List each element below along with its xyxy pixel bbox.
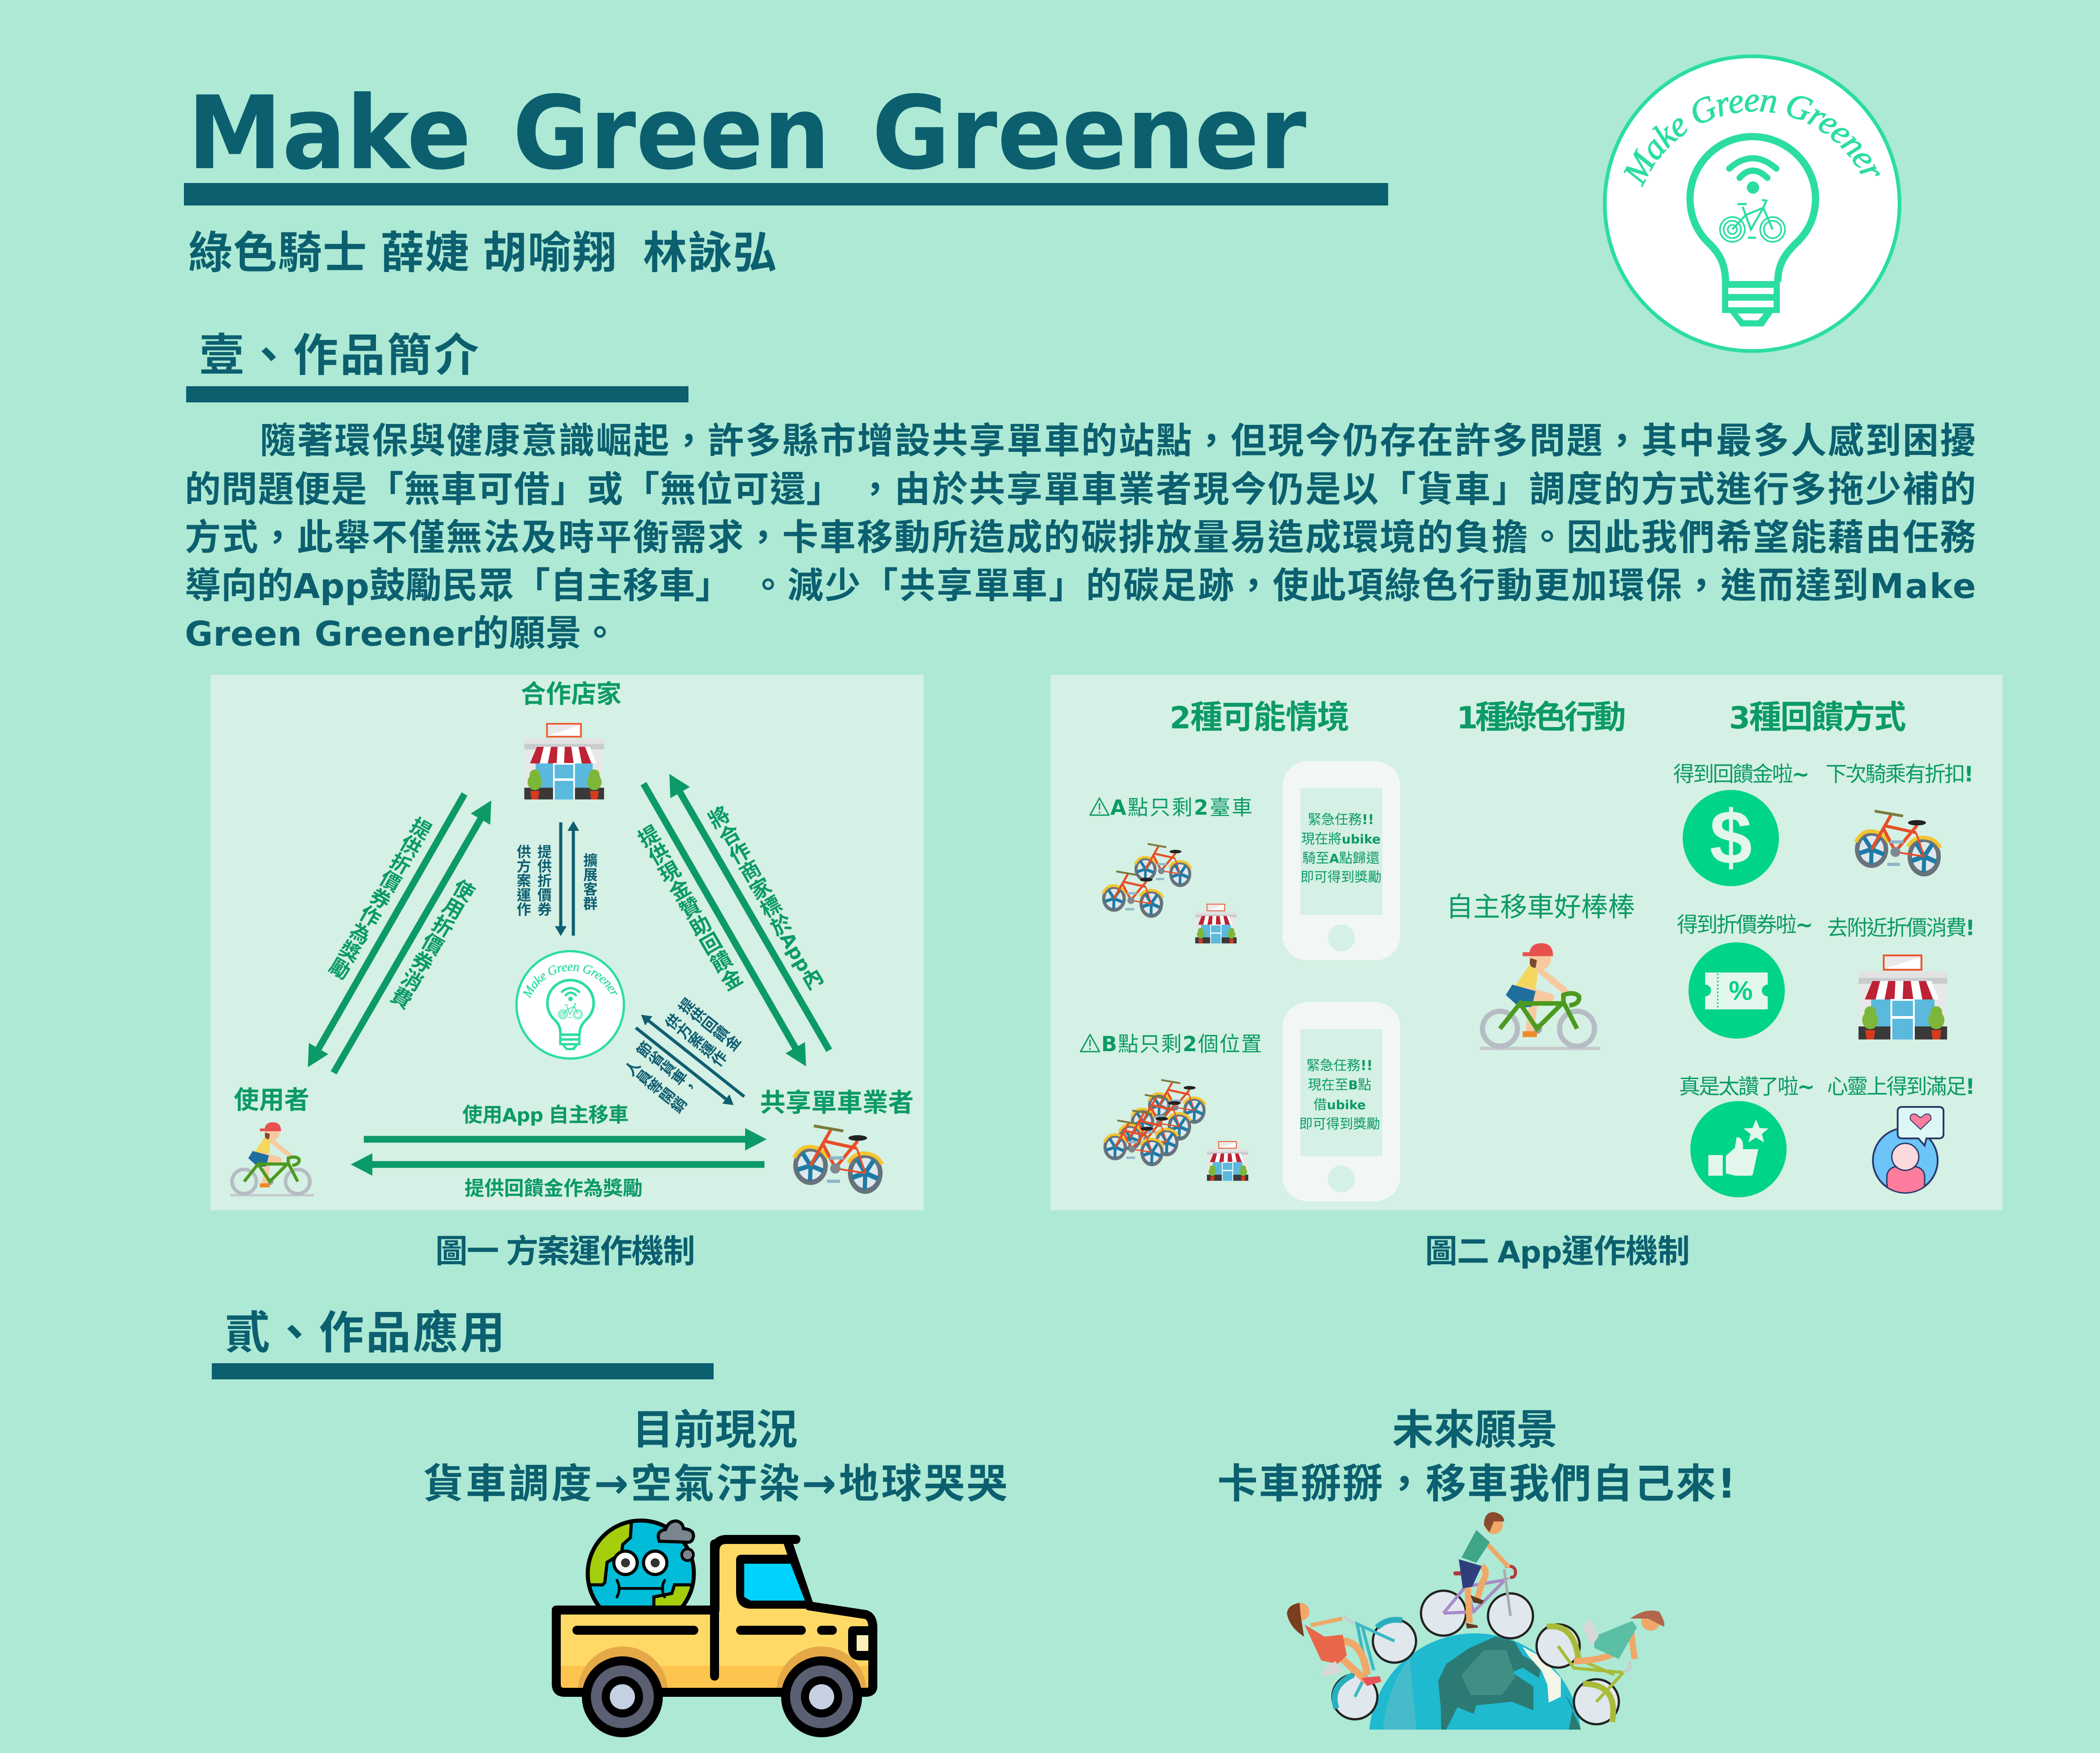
truck body — [556, 1539, 873, 1692]
phone B message: 緊急任務!! — [1306, 1058, 1373, 1074]
phone A message — [1300, 812, 1381, 885]
crying earth — [585, 1519, 696, 1606]
center cyclist — [1421, 1512, 1533, 1638]
arrow: operator to logo — [648, 1021, 744, 1097]
current situation text: 貨車調度→空氣汙染→地球哭哭 — [423, 1459, 1007, 1508]
warning icon B — [1081, 1035, 1099, 1052]
arrow: operator to store — [680, 792, 829, 1050]
truck headlamp — [848, 1626, 877, 1660]
title: Greener — [872, 75, 1306, 192]
phone B — [1282, 1002, 1400, 1201]
arrow: store to operator — [643, 784, 795, 1048]
icon: coupon — [1689, 942, 1785, 1039]
label: cash reward: 提供回饋金作為獎勵 — [465, 1178, 643, 1200]
title — [188, 75, 1306, 192]
icon: bike — [794, 1126, 882, 1191]
heading: section one: 壹、作品簡介 — [199, 330, 479, 381]
phone A message: 緊急任務!! — [1308, 812, 1374, 828]
phone B message: 現在至B點 — [1308, 1078, 1372, 1093]
column heading: action: 1種綠色行動 — [1457, 700, 1626, 736]
scenario B text: B點只剩2個位置 — [1101, 1032, 1262, 1056]
label: provide scheme: 供方案運作 — [661, 1011, 729, 1071]
heading two bar — [212, 1363, 714, 1379]
intro paragraph: 的問題便是「無車可借」或「無位可還」 — [185, 469, 842, 509]
store A — [1195, 904, 1237, 943]
phone A — [1282, 761, 1400, 960]
small logo bulb — [547, 980, 594, 1050]
caption: figure one: 圖一 方案運作機制 — [435, 1234, 695, 1270]
intro paragraph: ，由於共享單車業者現今仍是以「貨車」調度的方式進行多拖少補的 — [857, 469, 1976, 509]
current situation heading: 目前現況 — [632, 1407, 798, 1453]
truck window — [736, 1555, 812, 1609]
icon: cyclist large — [1480, 943, 1600, 1050]
logo wordmark: Make Green Greener — [1614, 80, 1893, 191]
right cyclist — [1537, 1610, 1664, 1724]
small logo wordmark: Make Green Greener — [520, 959, 622, 1000]
intro paragraph: 。減少「共享單車」的碳足跡，使此項綠色行動更加環保，進而達到Make — [750, 566, 1976, 606]
small logo — [517, 951, 624, 1058]
label: staff cost: 人員等開銷 — [621, 1057, 689, 1117]
logo — [1605, 56, 1899, 351]
intro paragraph — [185, 421, 1976, 654]
intro paragraph: Green Greener的願景。 — [185, 613, 618, 654]
title: Green — [513, 75, 830, 192]
arrow: up to store — [572, 830, 575, 936]
label: use coupon: 使用折價券消費 — [385, 875, 478, 1012]
icon: store reward — [1859, 955, 1947, 1039]
illustration: truck with earth — [556, 1515, 877, 1737]
icon: cyclist — [230, 1122, 314, 1196]
warning icon A — [1090, 798, 1109, 815]
caption: figure two: 圖二 App運作機制 — [1425, 1234, 1690, 1270]
panel: scheme mechanism — [210, 675, 924, 1210]
future vision text: 卡車掰掰，移車我們自己來! — [1217, 1460, 1736, 1508]
arrow: logo to operator — [636, 1028, 726, 1099]
label: list stores in app: 將合作商家標於App內 — [702, 803, 827, 994]
icon: dollar — [1683, 790, 1779, 886]
column heading: feedback: 3種回饋方式 — [1729, 700, 1906, 736]
feedback: satisfied text: 心靈上得到滿足! — [1827, 1075, 1975, 1099]
panel: app mechanism — [1050, 675, 2002, 1210]
icon: coupon: % — [1729, 976, 1753, 1006]
intro paragraph: 隨著環保與健康意識崛起，許多縣市增設共享單車的站點，但現今仍存在許多問題，其中最多人感到困擾 — [260, 421, 1976, 461]
store B — [1207, 1142, 1248, 1181]
intro paragraph: 導向的App鼓勵民眾「自主移車」 — [185, 566, 731, 606]
action label: 自主移車好棒棒 — [1446, 892, 1635, 922]
feedback: great text: 真是太讚了啦~ — [1679, 1075, 1815, 1099]
icon: happy user — [1873, 1107, 1944, 1194]
heading one bar — [186, 386, 688, 402]
title: Make — [188, 75, 471, 192]
heading: section two: 貳、作品應用 — [225, 1308, 505, 1358]
bikes A — [1103, 844, 1191, 916]
authors: 綠色騎士 薛婕 胡喻翔 林詠弘 — [188, 228, 777, 277]
arrow: store to user — [318, 794, 465, 1049]
label: save truck cost: 節省貨車， — [633, 1039, 701, 1098]
illustration: cyclists on earth — [1287, 1512, 1664, 1730]
bikes B — [1104, 1080, 1205, 1164]
label: provide feedback money: 提供回饋金 — [675, 995, 743, 1055]
phone B message: 借ubike — [1314, 1097, 1366, 1112]
feedback: nearby text: 去附近折價消費! — [1827, 916, 1975, 941]
phone A message: 現在將ubike — [1301, 832, 1381, 847]
phone A message: 即可得到獎勵 — [1300, 870, 1381, 885]
operator label: 共享單車業者 — [760, 1088, 914, 1117]
arrow: user to store — [334, 819, 481, 1073]
icon: dollar: $ — [1710, 795, 1752, 880]
arrow: down to logo — [559, 822, 562, 927]
phone A message: 騎至A點歸還 — [1302, 851, 1380, 866]
feedback: money text: 得到回饋金啦~ — [1673, 762, 1810, 787]
label: cash sponsor: 提供現金贊助回饋金 — [632, 822, 746, 995]
left cyclist — [1287, 1603, 1416, 1719]
intro paragraph: 方式，此舉不僅無法及時平衡需求，卡車移動所造成的碳排放量易造成環境的負擔。因此我們希望能藉由任務 — [185, 517, 1976, 558]
label: coupon reward: 提供折價券作為獎勵 — [324, 813, 435, 982]
arrow: operator to user — [372, 1161, 764, 1168]
label: expand customers: 擴展客群 — [581, 853, 598, 910]
title underline bar — [184, 183, 1388, 205]
truck stripes and door line — [577, 1544, 832, 1676]
scenario A text: A點只剩2臺車 — [1110, 795, 1252, 820]
label: provide scheme operation: 供方案運作 — [515, 844, 531, 916]
phone B message — [1299, 1058, 1380, 1132]
user label: 使用者 — [234, 1086, 309, 1114]
label: provide coupon: 提供折價券 — [536, 844, 552, 916]
column heading: scenarios: 2種可能情境 — [1170, 700, 1349, 736]
feedback: coupon text: 得到折價券啦~ — [1677, 913, 1813, 937]
icon: thumbs up — [1690, 1101, 1787, 1197]
globe — [1369, 1633, 1581, 1730]
label: move bike with app: 使用App 自主移車 — [462, 1103, 629, 1126]
phone B message: 即可得到獎勵 — [1299, 1117, 1380, 1132]
icon: store — [524, 724, 604, 799]
partner store label: 合作店家 — [521, 680, 621, 708]
truck wheels — [582, 1656, 862, 1737]
feedback: next ride text: 下次騎乘有折扣! — [1826, 762, 1974, 787]
arrow: user to operator — [364, 1136, 746, 1143]
future vision heading: 未來願景 — [1392, 1407, 1558, 1453]
icon: bike reward — [1856, 811, 1940, 874]
logo bulb icon — [1690, 137, 1815, 326]
